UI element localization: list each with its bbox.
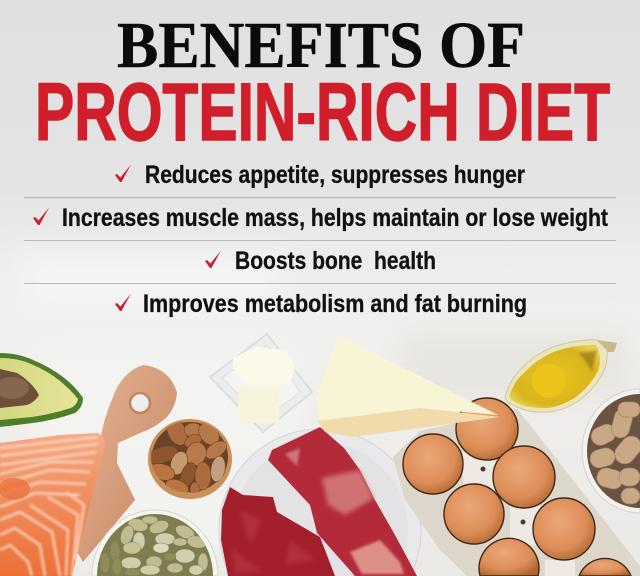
egg carton (393, 398, 640, 576)
benefit 3: Boosts bone health (235, 247, 436, 275)
meat: front steak (221, 487, 335, 576)
title: Benefits of: BENEFITS OF (117, 9, 525, 82)
pumpkin seed bowl (92, 510, 218, 576)
cheese wedge (316, 335, 500, 437)
avocado (0, 353, 83, 427)
olive oil gravy boat (505, 340, 617, 412)
butter in glass dish (210, 334, 312, 432)
wooden spoon (70, 365, 177, 562)
meat: long strip (268, 427, 417, 576)
benefits list (33, 161, 609, 318)
peanut bowl (582, 389, 640, 513)
plate (219, 429, 421, 576)
almond bowl (144, 416, 232, 499)
eggs (403, 398, 631, 576)
benefit 4: Improves metabolism and fat burning (143, 290, 527, 318)
salmon fillet (0, 430, 110, 576)
benefit 1: Reduces appetite, suppresses hunger (145, 161, 525, 189)
